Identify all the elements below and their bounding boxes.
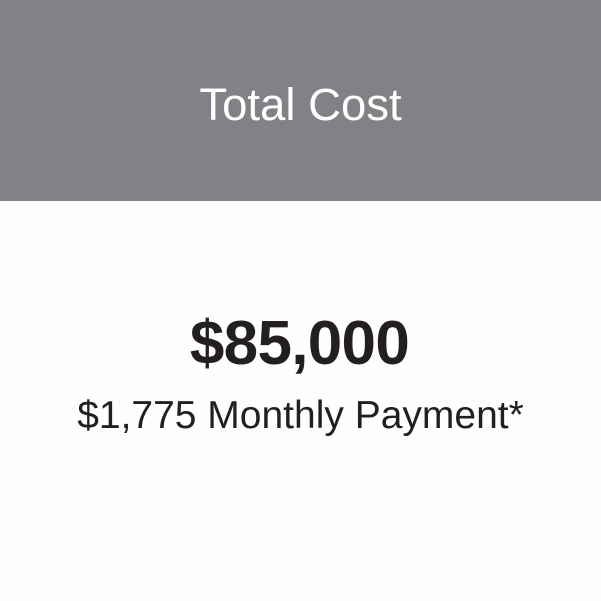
header panel: total cost <box>0 0 601 201</box>
heading: Total Cost: Total Cost <box>199 79 402 130</box>
monthly payment text: $1,775 Monthly Payment* <box>77 394 524 437</box>
total price figure: $85,000 <box>190 309 409 378</box>
